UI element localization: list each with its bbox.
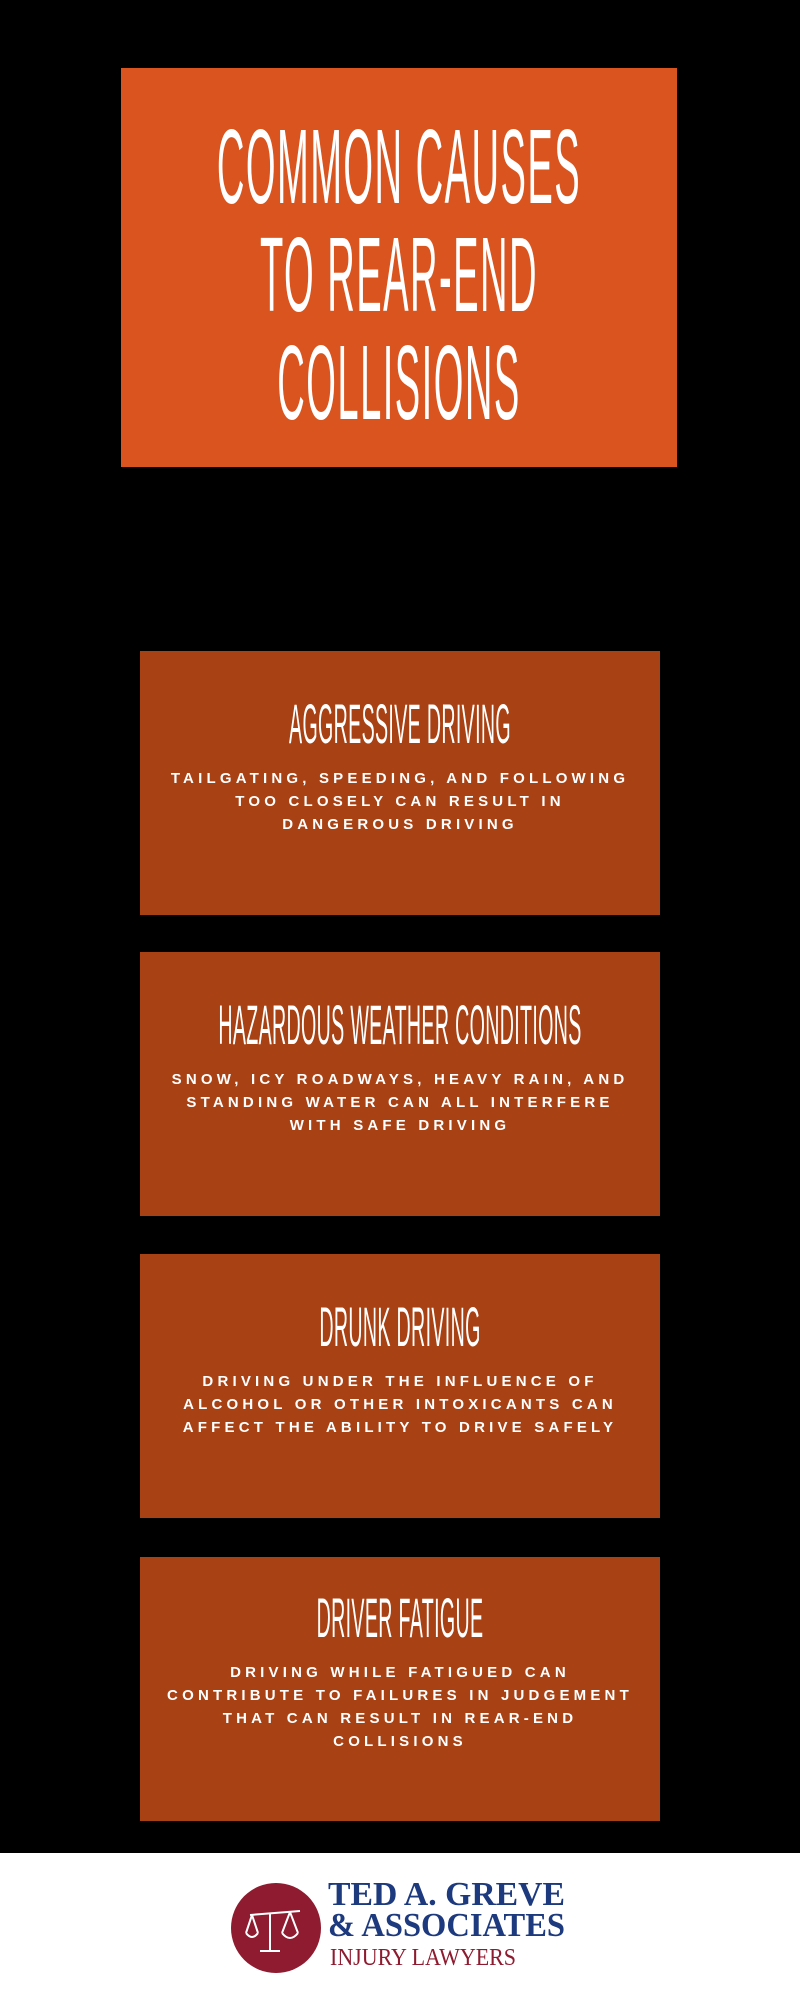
text block: DRIVING WHILE FATIGUED CAN: [230, 1664, 570, 1681]
text block: TOO CLOSELY CAN RESULT IN: [235, 793, 565, 810]
logo text: TED A. GREVE: [328, 1876, 565, 1913]
heading: DRUNK DRIVING: [319, 1295, 481, 1358]
text block: [183, 1373, 617, 1436]
title box: [121, 68, 677, 467]
text block: AFFECT THE ABILITY TO DRIVE SAFELY: [183, 1419, 617, 1436]
panel: drunk driving: [140, 1254, 660, 1518]
logo text: [328, 1876, 565, 1971]
text block: COLLISIONS: [333, 1733, 467, 1750]
text block: CONTRIBUTE TO FAILURES IN JUDGEMENT: [167, 1687, 633, 1704]
text block: DANGEROUS DRIVING: [282, 816, 518, 833]
logo text: INJURY LAWYERS: [330, 1945, 516, 1971]
title line 2: TO REAR-END: [260, 216, 538, 334]
icon: scales circle: [231, 1883, 321, 1973]
text block: SNOW, ICY ROADWAYS, HEAVY RAIN, AND: [172, 1071, 628, 1088]
logo: [231, 1876, 565, 1973]
footer: [0, 1853, 800, 2000]
text block: THAT CAN RESULT IN REAR-END: [223, 1710, 577, 1727]
text block: [172, 1071, 628, 1134]
text block: STANDING WATER CAN ALL INTERFERE: [186, 1094, 614, 1111]
text block: TAILGATING, SPEEDING, AND FOLLOWING: [171, 770, 629, 787]
text block: ALCOHOL OR OTHER INTOXICANTS CAN: [183, 1396, 617, 1413]
heading: HAZARDOUS WEATHER CONDITIONS: [218, 993, 582, 1056]
title line 3: COLLISIONS: [277, 324, 521, 442]
panel: driver fatigue: [140, 1557, 660, 1821]
heading: AGGRESSIVE DRIVING: [289, 692, 511, 755]
panel: aggressive driving: [140, 651, 660, 915]
text block: [167, 1664, 633, 1750]
heading: DRIVER FATIGUE: [317, 1586, 483, 1649]
text block: DRIVING UNDER THE INFLUENCE OF: [202, 1373, 598, 1390]
panel: hazardous weather: [140, 952, 660, 1216]
text block: [171, 770, 629, 833]
text block: WITH SAFE DRIVING: [290, 1117, 510, 1134]
logo text: & ASSOCIATES: [328, 1907, 565, 1944]
title line 1: COMMON CAUSES: [217, 108, 581, 226]
